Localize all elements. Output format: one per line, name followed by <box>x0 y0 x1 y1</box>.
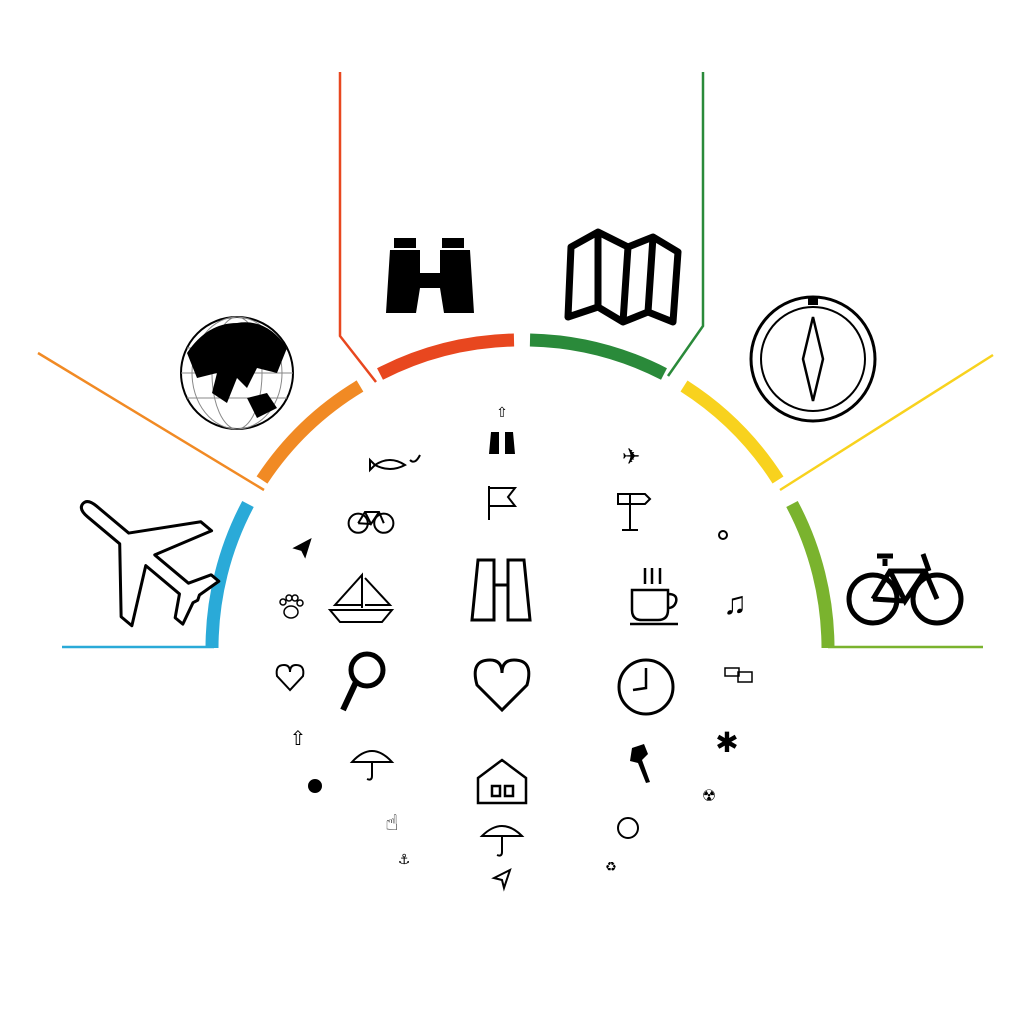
icon: signpost <box>618 494 650 530</box>
line: blue <box>62 646 214 648</box>
icon: binoculars large <box>386 238 474 313</box>
icon: airplane <box>43 456 241 650</box>
icon: arrow up: ⇧ <box>496 404 508 420</box>
line: yellow <box>780 355 993 490</box>
icon: globe <box>181 317 293 429</box>
icon: recycle: ♻ <box>605 859 617 874</box>
icon: coffee <box>630 568 678 624</box>
icon: medical star: ✱ <box>715 727 739 758</box>
arc: blue <box>212 504 248 648</box>
icon: clock <box>619 660 673 714</box>
icon: radiation: ☢ <box>702 788 716 805</box>
icon: music: ♫ <box>723 585 747 621</box>
icon: info <box>309 780 321 792</box>
arc: light green <box>792 504 828 648</box>
icon: small compass <box>618 818 638 838</box>
line: red <box>340 72 376 382</box>
icon: magnifier <box>351 654 383 686</box>
arc segments <box>212 340 828 648</box>
icon: compass <box>751 297 875 421</box>
icon: bicycle <box>849 554 961 623</box>
icon: pointer small <box>494 870 510 888</box>
arc: yellow <box>684 386 778 480</box>
icon: hand: ☝ <box>385 810 399 835</box>
line: light green <box>828 646 983 648</box>
icon: heart small <box>277 665 303 690</box>
icon: arrow up 2: ⇧ <box>290 728 306 750</box>
icon: paw <box>280 595 303 618</box>
icon: chat <box>725 668 752 682</box>
icon: map <box>568 232 678 322</box>
icon: umbrella <box>352 751 392 780</box>
icon: bike small <box>349 512 393 533</box>
arc: dark green <box>530 340 664 374</box>
icon: anchor: ⚓ <box>398 851 410 867</box>
line: orange <box>38 353 264 490</box>
icon: pushpin <box>630 744 650 783</box>
icon: umbrella small <box>482 826 522 856</box>
icon: fish <box>370 455 420 470</box>
icon: pin <box>719 531 727 539</box>
icon: binoculars center <box>472 560 530 620</box>
icon: flag <box>489 486 515 520</box>
line: dark green <box>668 72 703 376</box>
icon: pointer <box>295 540 310 556</box>
small icons cluster <box>277 404 752 888</box>
icon: heart large <box>475 660 529 710</box>
connector lines <box>38 72 993 647</box>
icon: house <box>478 760 526 803</box>
icon: sailboat <box>330 575 392 622</box>
icon: plane small: ✈ <box>622 444 640 469</box>
icon: small binoculars <box>489 432 515 454</box>
arc: red <box>380 340 514 374</box>
arc: orange <box>262 386 360 480</box>
